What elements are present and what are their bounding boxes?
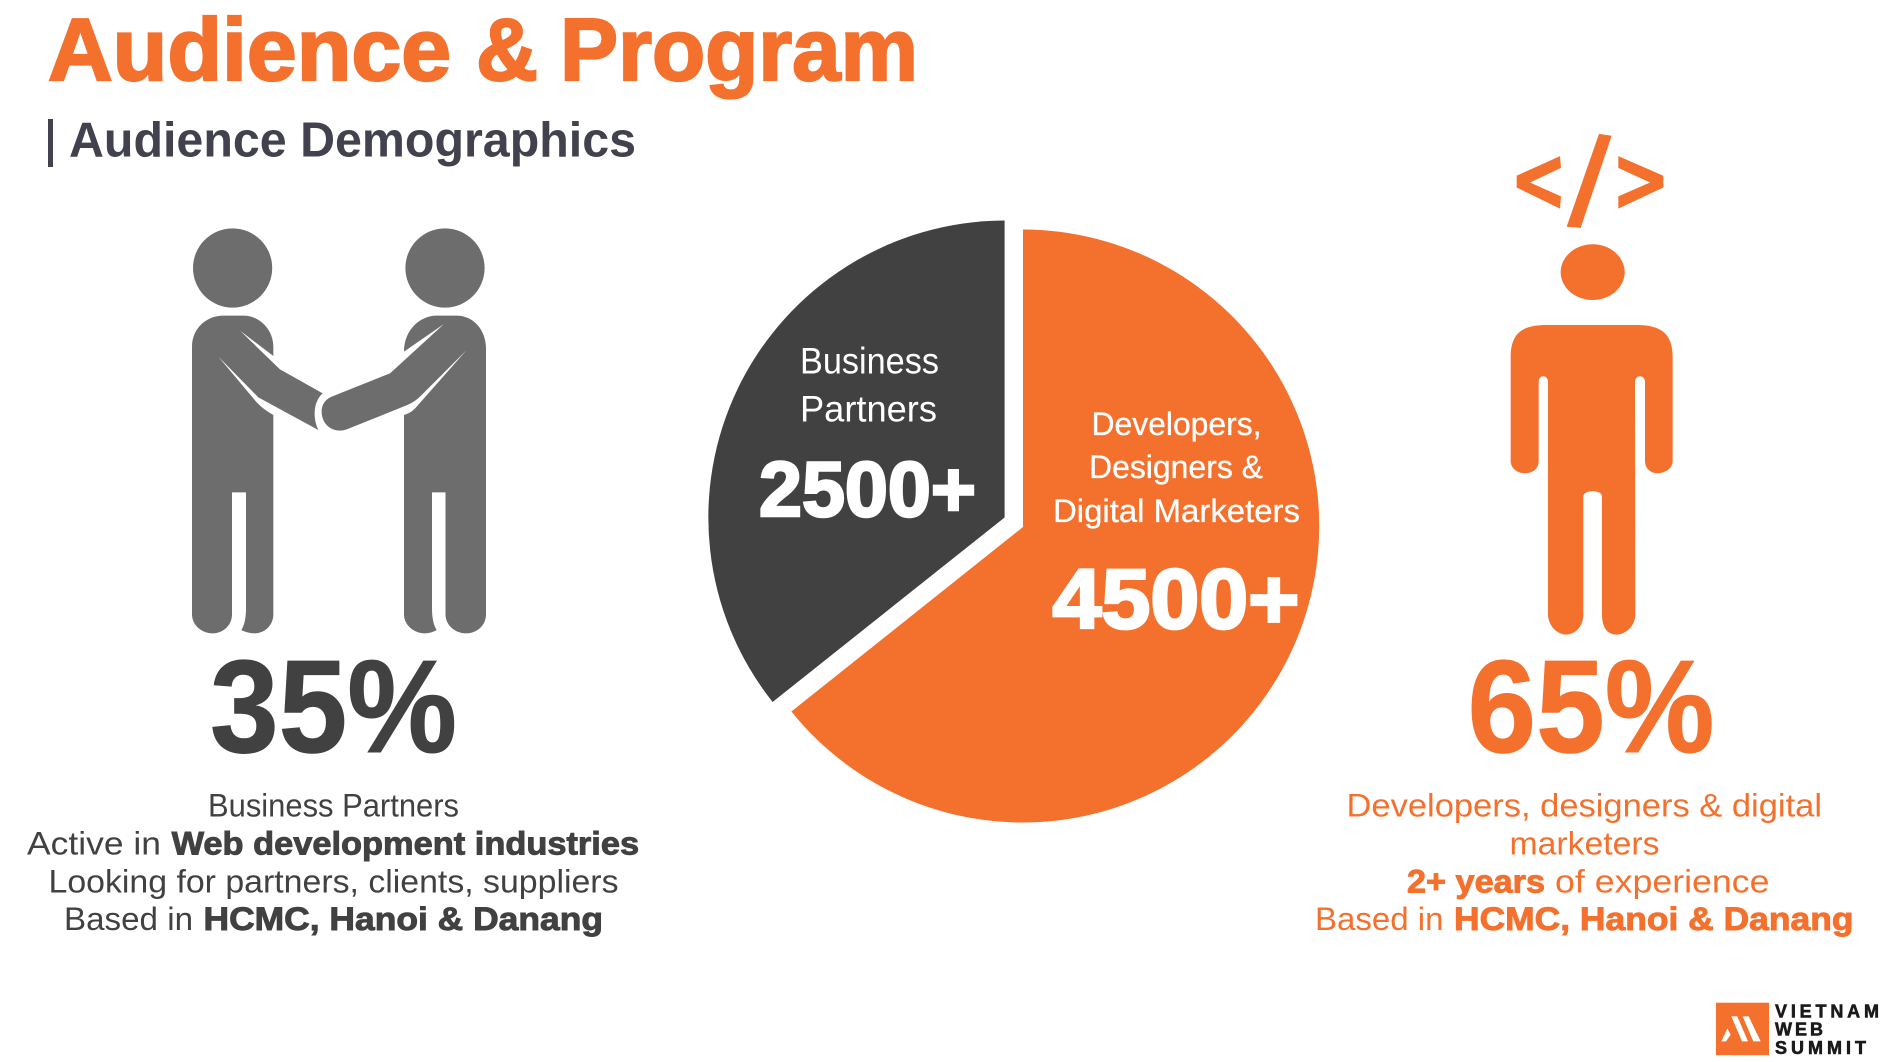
text block: business partners description: Business Partners — [208, 788, 459, 824]
pie label: business partners: 2500+ — [759, 445, 976, 533]
pie slice: developers — [791, 230, 1319, 822]
text block: developers description: HCMC, Hanoi & Danang — [1454, 901, 1854, 937]
pie label: developers: Developers, — [1092, 406, 1262, 442]
text block: developers description: of experience — [1555, 863, 1770, 899]
pie label: business partners: Partners — [800, 389, 937, 430]
pie label: developers: Digital Marketers — [1053, 493, 1300, 529]
text block: business partners description: Looking for partners, clients, suppliers — [48, 863, 618, 899]
text block: developers description — [1315, 788, 1854, 937]
title — [48, 0, 918, 99]
text block: business partners description: Based in — [64, 901, 193, 937]
title: & — [476, 0, 538, 99]
title: Program — [560, 0, 918, 99]
panel: business partners — [27, 228, 639, 937]
icon: handshake — [192, 228, 486, 633]
text block: business partners description — [27, 788, 639, 937]
text block: developers description: Based in — [1315, 901, 1444, 937]
logo: Vietnam Web Summit — [1716, 1002, 1879, 1058]
text block: business partners description: HCMC, Hanoi & Danang — [204, 901, 603, 937]
pie slice: business partners — [708, 220, 1005, 702]
text block: business partners description: Active in — [27, 825, 161, 861]
pie label: business partners — [759, 340, 976, 533]
pie label: developers: 4500+ — [1052, 552, 1300, 646]
pie label: developers: Designers & — [1089, 449, 1263, 485]
panel: developers — [1315, 134, 1854, 937]
subtitle: Audience Demographics — [69, 114, 636, 168]
pie label: business partners: Business — [800, 340, 939, 382]
text block: developers description: 2+ years — [1407, 863, 1545, 899]
logo: Vietnam Web Summit: SUMMIT — [1775, 1038, 1866, 1058]
icon: person with code tag — [1511, 134, 1673, 635]
percentage: 35%: 35% — [210, 633, 457, 780]
text block: developers description: marketers — [1510, 825, 1660, 861]
logo: Vietnam Web Summit: VIETNAM — [1775, 1002, 1879, 1022]
logo: Vietnam Web Summit: WEB — [1775, 1020, 1823, 1040]
percentage: 65%: 65% — [1468, 633, 1714, 780]
text block: developers description: Developers, designers & digital — [1346, 788, 1822, 824]
text block: business partners description: Web development industries — [172, 825, 639, 861]
pie chart — [708, 220, 1319, 822]
pie label: developers — [1052, 406, 1300, 646]
title: Audience — [48, 0, 451, 99]
